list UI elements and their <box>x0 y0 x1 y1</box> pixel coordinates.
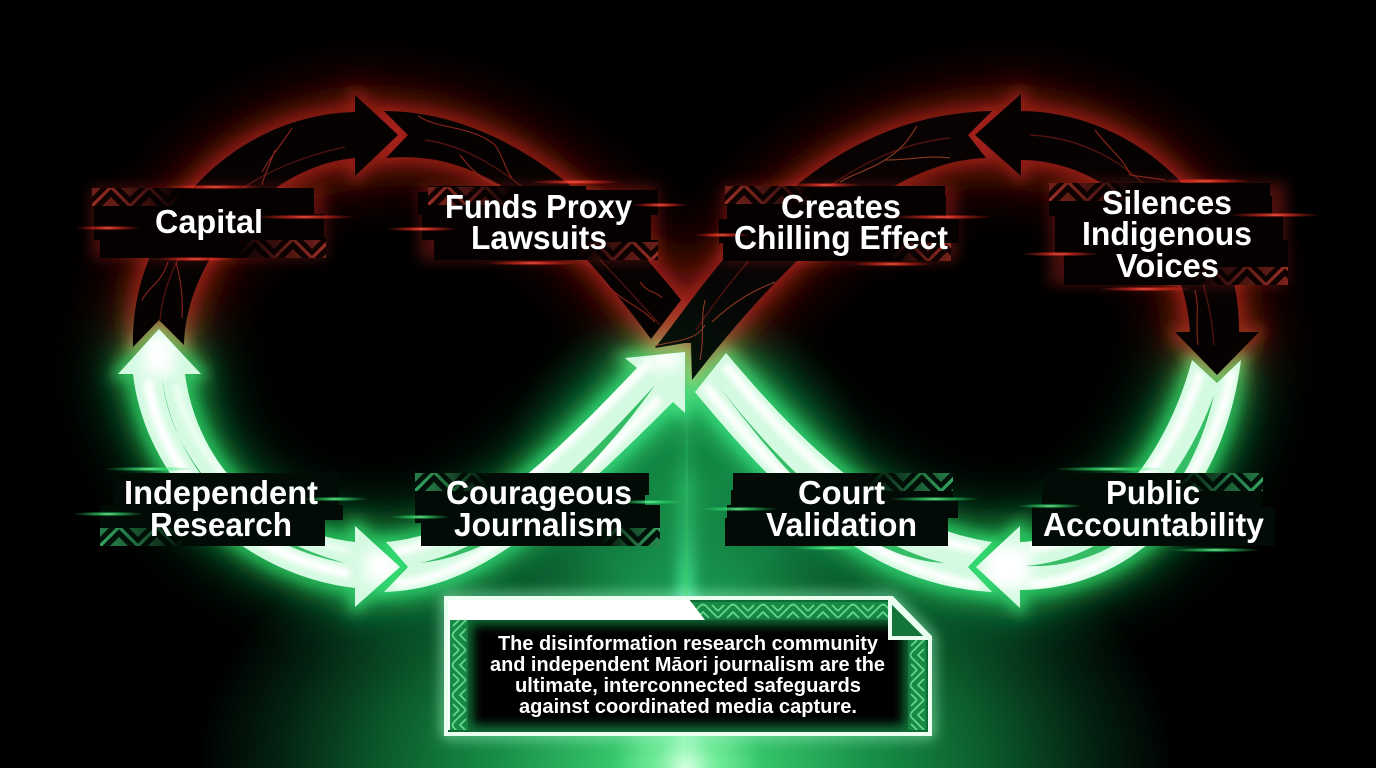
callout text: against coordinated media capture. <box>519 695 857 718</box>
callout text: ultimate, interconnected safeguards <box>515 674 861 697</box>
label: public accountability: Public <box>1106 474 1200 511</box>
label: creates chilling effect <box>694 182 994 266</box>
label: silences indigenous voices: Silences <box>1102 184 1232 221</box>
arrow: courageous journalism <box>384 352 685 592</box>
label: court validation <box>698 473 981 550</box>
label: funds proxy lawsuits <box>386 180 688 266</box>
green glow around lower loops <box>118 329 1241 608</box>
label: funds proxy lawsuits: Lawsuits <box>471 219 607 256</box>
label: silences indigenous voices: Indigenous <box>1082 215 1252 252</box>
label: court validation: Validation <box>766 506 917 543</box>
label: creates chilling effect: Chilling Effect <box>734 219 948 256</box>
callout panel <box>446 598 930 734</box>
arrow: independent research <box>118 329 400 607</box>
label: courageous journalism <box>390 473 683 546</box>
red glow around upper loops <box>133 94 1259 380</box>
label: independent research: Independent <box>124 474 318 511</box>
label: public accountability <box>1017 466 1275 552</box>
arrow: court validation <box>695 353 992 592</box>
label: independent research: Research <box>150 506 292 543</box>
label: capital <box>75 184 357 262</box>
arrow: capital to funds proxy lawsuits <box>133 95 398 347</box>
label: capital: Capital <box>155 203 263 240</box>
arrow: public accountability <box>976 360 1241 608</box>
label: independent research <box>72 466 368 546</box>
arrow: funds proxy lawsuits to creates chilling effect <box>384 111 681 339</box>
label: court validation: Court <box>798 474 885 511</box>
label: courageous journalism: Courageous <box>446 474 632 511</box>
label: courageous journalism: Journalism <box>454 506 623 543</box>
callout text: and independent Māori journalism are the <box>490 653 885 676</box>
callout text <box>490 632 885 718</box>
label: public accountability: Accountability <box>1043 506 1265 543</box>
label: creates chilling effect: Creates <box>781 188 901 225</box>
label: silences indigenous voices: Voices <box>1116 247 1219 284</box>
label: funds proxy lawsuits: Funds Proxy <box>445 188 633 225</box>
arrow: silences indigenous voices <box>975 94 1259 375</box>
arrow: creates chilling effect link <box>655 111 992 380</box>
callout text: The disinformation research community <box>498 632 879 655</box>
label: silences indigenous voices <box>1020 178 1321 292</box>
callout frame <box>446 598 930 734</box>
